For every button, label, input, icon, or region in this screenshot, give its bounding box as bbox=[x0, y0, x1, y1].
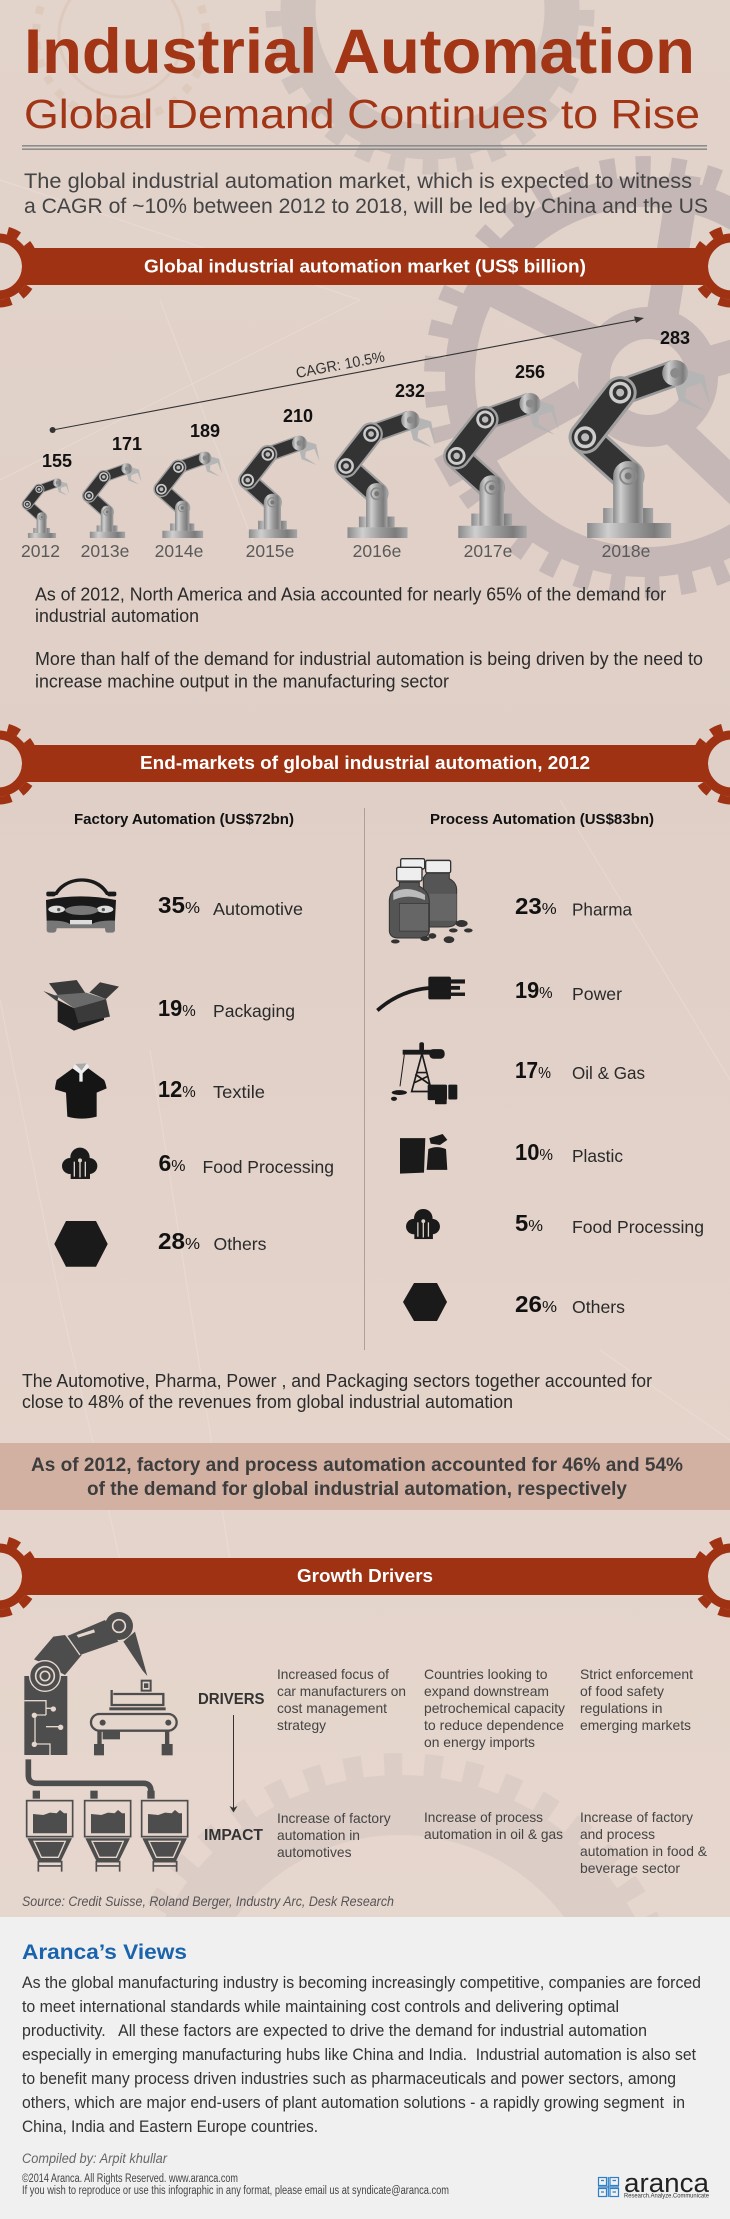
year labels: 2018e bbox=[602, 541, 650, 561]
robot 2012 bbox=[24, 478, 69, 538]
market commentary: As of 2012, North America and Asia accounted for nearly 65% of the demand for bbox=[35, 584, 666, 604]
icon: factory robot and hoppers bbox=[24, 1612, 188, 1872]
values: 210 bbox=[283, 406, 313, 426]
year labels: 2013e bbox=[81, 541, 129, 561]
views body: productivity. All these factors are expected to drive the demand for industrial automation bbox=[22, 2022, 647, 2040]
impact 1: Increase of factory bbox=[277, 1810, 391, 1826]
impact 1 bbox=[277, 1810, 391, 1860]
robot 2013e bbox=[84, 463, 142, 538]
stat: others: Others bbox=[214, 1234, 267, 1254]
driver 2: on energy imports bbox=[424, 1734, 535, 1750]
values: 155 bbox=[42, 451, 72, 471]
stat: plastic bbox=[515, 1139, 623, 1166]
driver 1 bbox=[277, 1666, 406, 1733]
stat: oil and gas: Oil & Gas bbox=[572, 1063, 645, 1083]
process icons bbox=[377, 859, 473, 1174]
stat: food processing: 6% bbox=[158, 1150, 186, 1176]
year labels: 2016e bbox=[353, 541, 401, 561]
banner: end-markets bbox=[0, 725, 730, 802]
robot 2018e bbox=[574, 360, 710, 538]
values: 283 bbox=[660, 328, 690, 348]
icon: others hexagon bbox=[403, 1283, 447, 1321]
icon: shirt bbox=[55, 1063, 107, 1119]
icon: plastic bags bbox=[400, 1134, 447, 1174]
stat: pharma bbox=[515, 893, 632, 920]
icon: others hexagon bbox=[54, 1221, 108, 1267]
subtitle: Global Demand Continues to Rise bbox=[24, 91, 700, 137]
stat: food processing: Food Processing bbox=[202, 1157, 334, 1177]
stat: pharma: 23% bbox=[515, 893, 557, 919]
stat: textile: 12% bbox=[158, 1076, 196, 1102]
stat: others: 26% bbox=[515, 1291, 557, 1317]
icon: oil rig bbox=[391, 1042, 457, 1104]
driver 2 bbox=[424, 1666, 565, 1750]
values: 232 bbox=[395, 381, 425, 401]
values bbox=[42, 328, 690, 471]
views body: to meet international standards while maintaining cost controls and delivering optimal bbox=[22, 1998, 619, 2016]
driver 1: strategy bbox=[277, 1717, 326, 1733]
values: 171 bbox=[112, 434, 142, 454]
icon: food processing bbox=[406, 1209, 440, 1239]
factory heading: Factory Automation (US$72bn) bbox=[74, 811, 294, 828]
market commentary: industrial automation bbox=[35, 606, 199, 626]
stat: power: 19% bbox=[515, 977, 553, 1003]
stat: oil and gas: 17% bbox=[515, 1057, 551, 1083]
arrow: drivers to impact bbox=[230, 1715, 238, 1812]
year labels: 2017e bbox=[464, 541, 512, 561]
year labels: 2012 bbox=[21, 541, 60, 561]
highlight band: of the demand for global industrial automation, respectively bbox=[87, 1478, 627, 1500]
impact 3: automation in food & bbox=[580, 1843, 708, 1859]
logo: aranca: Research.Analyze.Communicate bbox=[624, 2194, 710, 2200]
banner: end-markets: End-markets of global industrial automation, 2012 bbox=[140, 752, 590, 773]
robot 2017e bbox=[448, 393, 559, 538]
driver 2: expand downstream bbox=[424, 1683, 549, 1699]
market commentary bbox=[35, 584, 703, 692]
source: Source: Credit Suisse, Roland Berger, Industry Arc, Desk Research bbox=[22, 1894, 394, 1909]
stat: packaging: 19% bbox=[158, 995, 196, 1021]
process heading: Process Automation (US$83bn) bbox=[430, 811, 654, 828]
stat: plastic: 10% bbox=[515, 1139, 553, 1165]
robot 2016e bbox=[338, 411, 435, 538]
CAGR label: CAGR: 10.5% bbox=[295, 349, 386, 382]
views heading: Aranca’s Views bbox=[22, 1941, 187, 1964]
driver 3: regulations in bbox=[580, 1700, 662, 1716]
stat: power: Power bbox=[572, 984, 622, 1004]
label: impact: IMPACT bbox=[204, 1827, 263, 1844]
year labels: 2014e bbox=[155, 541, 203, 561]
drivers text bbox=[277, 1666, 693, 1750]
compiled by: Compiled by: Arpit khullar bbox=[22, 2151, 167, 2166]
stat: textile: Textile bbox=[213, 1082, 265, 1102]
impact text bbox=[277, 1809, 708, 1876]
banner: global market bbox=[0, 228, 730, 305]
impact 2: automation in oil & gas bbox=[424, 1826, 563, 1842]
highlight band: As of 2012, factory and process automation accounted for 46% and 54% bbox=[31, 1454, 683, 1476]
driver 3: of food safety bbox=[580, 1683, 664, 1699]
driver 2: petrochemical capacity bbox=[424, 1700, 565, 1716]
driver 2: to reduce dependence bbox=[424, 1717, 564, 1733]
impact 1: automation in bbox=[277, 1827, 360, 1843]
stat: others bbox=[515, 1291, 625, 1317]
icon: power plug bbox=[377, 977, 465, 1010]
stat: power bbox=[515, 977, 622, 1004]
highlight band bbox=[0, 1443, 730, 1510]
intro text: a CAGR of ~10% between 2012 to 2018, will be led by China and the US bbox=[24, 195, 708, 218]
sectors note: close to 48% of the revenues from global industrial automation bbox=[22, 1392, 513, 1412]
market commentary: More than half of the demand for industrial automation is being driven by the need to bbox=[35, 649, 703, 669]
icon: food processing bbox=[62, 1148, 97, 1179]
icon: pharma bbox=[389, 859, 473, 944]
stat: textile bbox=[158, 1076, 265, 1102]
logo: aranca: aranca bbox=[624, 2168, 710, 2198]
stat: food processing bbox=[515, 1210, 704, 1237]
driver 3: emerging markets bbox=[580, 1717, 691, 1733]
copyright: ©2014 Aranca. All Rights Reserved. www.aranca.com bbox=[22, 2173, 238, 2185]
values: 189 bbox=[190, 421, 220, 441]
impact 3: and process bbox=[580, 1826, 655, 1842]
stat: food processing: Food Processing bbox=[572, 1217, 704, 1237]
stat: others: 28% bbox=[158, 1228, 200, 1254]
banner: growth drivers: Growth Drivers bbox=[297, 1565, 433, 1586]
label: drivers: DRIVERS bbox=[198, 1691, 265, 1708]
driver 3: Strict enforcement bbox=[580, 1666, 693, 1682]
driver 1: car manufacturers on bbox=[277, 1683, 406, 1699]
banner: growth drivers bbox=[0, 1538, 730, 1615]
title: Industrial Automation bbox=[24, 17, 695, 87]
views body bbox=[22, 1974, 701, 2136]
icon: car bbox=[46, 878, 116, 933]
stat: automotive: 35% bbox=[158, 892, 200, 918]
panel: process automation bbox=[377, 811, 704, 1321]
copyright bbox=[22, 2173, 449, 2197]
impact 3: Increase of factory bbox=[580, 1809, 693, 1825]
impact 3: beverage sector bbox=[580, 1860, 680, 1876]
stat: pharma: Pharma bbox=[572, 900, 632, 920]
title rule bbox=[22, 145, 707, 150]
robot 2015e bbox=[241, 436, 320, 538]
stat: packaging: Packaging bbox=[213, 1001, 295, 1021]
stat: food processing bbox=[158, 1150, 334, 1177]
year labels bbox=[21, 541, 650, 561]
CAGR arrow bbox=[50, 316, 644, 433]
driver 1: cost management bbox=[277, 1700, 387, 1716]
stat: others bbox=[158, 1228, 267, 1254]
impact 1: automotives bbox=[277, 1844, 352, 1860]
robot 2014e bbox=[156, 452, 222, 538]
views body: others, which are major end-users of plant automation solutions - a rapidly growing segment in bbox=[22, 2094, 685, 2112]
impact 3 bbox=[580, 1809, 708, 1876]
views body: As the global manufacturing industry is becoming increasingly competitive, companies are forced bbox=[22, 1974, 701, 1992]
copyright: If you wish to reproduce or use this infographic in any format, please email us at syndicate@aranca.com bbox=[22, 2185, 449, 2197]
intro text bbox=[24, 170, 708, 218]
driver 3 bbox=[580, 1666, 693, 1733]
stat: oil and gas bbox=[515, 1057, 645, 1083]
panel: factory automation bbox=[43, 811, 334, 1267]
driver 1: Increased focus of bbox=[277, 1666, 389, 1682]
stat: packaging bbox=[158, 995, 295, 1021]
intro text: The global industrial automation market, which is expected to witness bbox=[24, 170, 692, 193]
views body: to benefit many process driven industries such as pharmaceuticals and power sectors, among bbox=[22, 2070, 676, 2088]
impact 2: Increase of process bbox=[424, 1809, 543, 1825]
driver 2: Countries looking to bbox=[424, 1666, 548, 1682]
chart: market size robots bbox=[21, 316, 710, 561]
stat: automotive bbox=[158, 892, 303, 919]
sectors note bbox=[22, 1371, 652, 1412]
views body: especially in emerging manufacturing hubs like China and India. Industrial automation is also set bbox=[22, 2046, 696, 2064]
views body: China, India and Eastern Europe countries. bbox=[22, 2118, 318, 2136]
stat: food processing: 5% bbox=[515, 1210, 543, 1236]
impact 2 bbox=[424, 1809, 563, 1842]
year labels: 2015e bbox=[246, 541, 294, 561]
panel: aranca's views bbox=[0, 1917, 730, 2219]
values: 256 bbox=[515, 362, 545, 382]
stat: plastic: Plastic bbox=[572, 1146, 623, 1166]
banner: global market: Global industrial automation market (US$ billion) bbox=[144, 256, 586, 276]
market commentary: increase machine output in the manufacturing sector bbox=[35, 672, 449, 692]
icon: box bbox=[43, 980, 119, 1031]
stat: others: Others bbox=[572, 1297, 625, 1317]
stat: automotive: Automotive bbox=[213, 899, 303, 919]
sectors note: The Automotive, Pharma, Power , and Packaging sectors together accounted for bbox=[22, 1371, 652, 1391]
